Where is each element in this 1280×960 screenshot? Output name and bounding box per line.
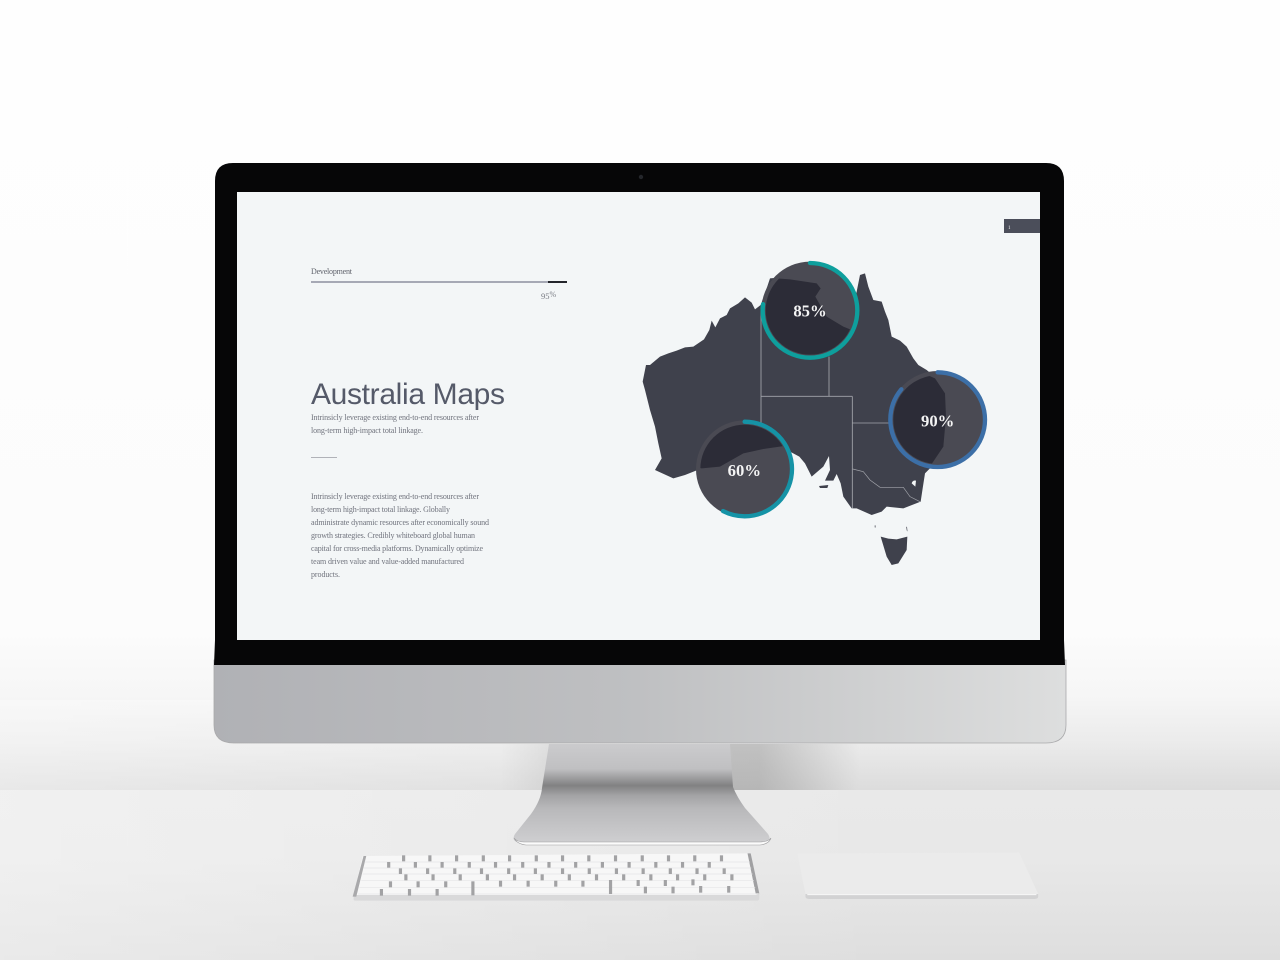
subtitle — [311, 413, 479, 435]
progress value: 95 — [541, 291, 550, 301]
monitor — [214, 163, 1066, 743]
monitor stand — [514, 744, 771, 845]
title: Australia Maps — [311, 378, 505, 411]
progress bar: development — [311, 267, 567, 301]
background desk — [0, 790, 1280, 960]
callout: 60%: 60% — [728, 461, 761, 480]
callout: 60% — [693, 417, 793, 518]
body text: capital for cross-media platforms. Dynamically optimize — [311, 544, 483, 553]
body text: products. — [311, 570, 340, 579]
monitor bezel — [214, 163, 1065, 665]
camera — [639, 175, 643, 179]
callout: 85%: 85% — [793, 302, 827, 321]
progress fill — [548, 281, 567, 283]
map landmass — [643, 273, 946, 515]
progress track — [311, 281, 549, 283]
progress label: Development — [311, 267, 353, 276]
callout: 90% — [887, 371, 986, 468]
body text — [311, 492, 489, 579]
body text: team driven value and value-added manufactured — [311, 557, 464, 566]
callout: 90%: 90% — [921, 412, 954, 431]
subtitle: Intrinsicly leverage existing end-to-end resources after — [311, 413, 479, 422]
body text: administrate dynamic resources after economically sound — [311, 518, 489, 527]
progress value: % — [550, 290, 556, 299]
screen — [237, 192, 1040, 640]
body text: long-term high-impact total linkage. Globally — [311, 505, 450, 514]
state borders — [761, 307, 920, 508]
trackpad — [797, 853, 1038, 899]
body text: Intrinsicly leverage existing end-to-end resources after — [311, 492, 479, 501]
monitor chin — [214, 660, 1066, 743]
page number badge: 1 — [1008, 226, 1011, 231]
callout: 85% — [761, 262, 859, 360]
australia map with callouts — [643, 262, 986, 565]
bay and islands — [819, 481, 916, 565]
subtitle: long-term high-impact total linkage. — [311, 426, 423, 435]
keyboard — [353, 853, 759, 901]
page number badge — [1004, 219, 1040, 233]
body text: growth strategies. Credibly whiteboard global human — [311, 531, 475, 540]
